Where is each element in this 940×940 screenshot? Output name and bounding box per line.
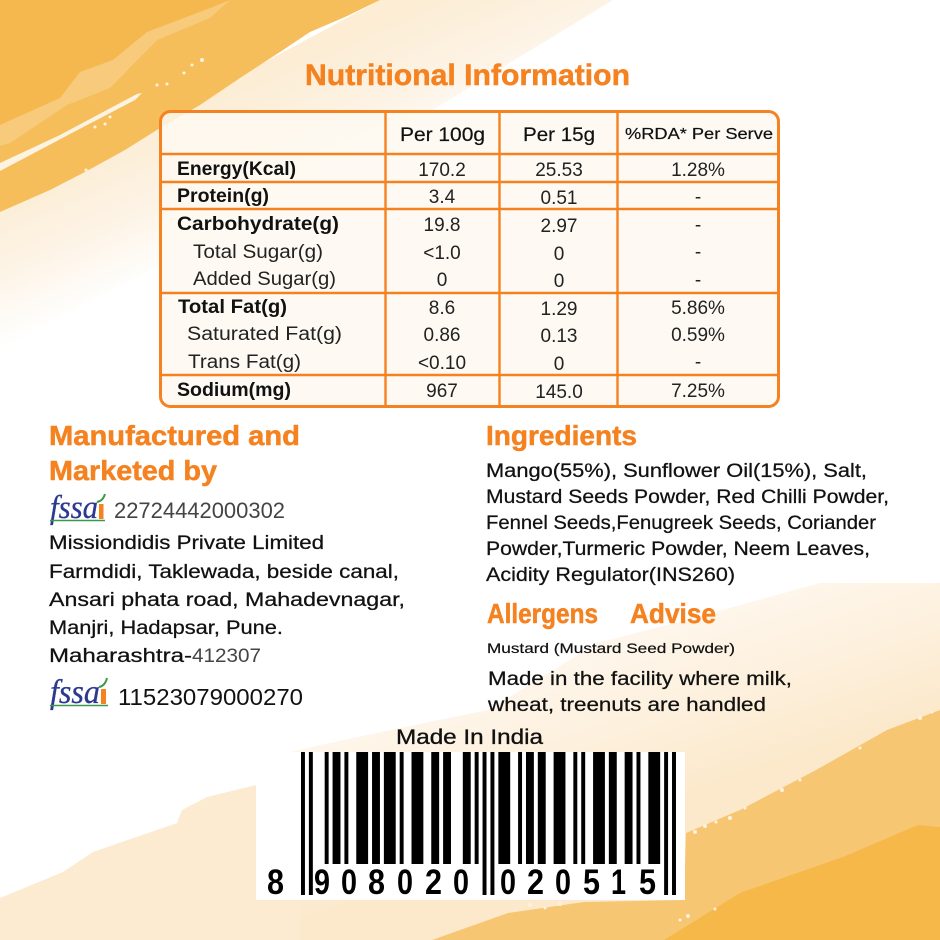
facility note [487, 669, 792, 716]
background: top-left white streak [0, 58, 204, 172]
made in india label: Made In India [396, 726, 543, 749]
barcode digits: 8 [267, 863, 284, 902]
facility note: wheat, treenuts are handled [487, 695, 766, 716]
address text: 412307 [192, 646, 261, 667]
row: carbohydrate: - [695, 215, 701, 236]
panel: nutrition table [160, 112, 778, 406]
row: total fat [178, 297, 725, 320]
row: sodium: 967 [426, 381, 458, 402]
address text: Ansari phata road, Mahadevnagar, [49, 590, 405, 611]
barcode digits: 0 [397, 863, 413, 902]
row: added sugar: 0 [437, 270, 447, 291]
ingredients list: Powder,Turmeric Powder, Neem Leaves, [486, 539, 870, 560]
row: protein [177, 186, 701, 209]
barcode digits: 0 [500, 863, 516, 902]
heading: manufactured and marketed by: Marketed by [49, 455, 217, 486]
row: total sugar: Total Sugar(g) [193, 242, 323, 263]
icon: fssai logo 2: fssa [50, 674, 100, 711]
licence number 2: 11523079000270 [118, 684, 303, 710]
table frame [160, 112, 778, 406]
row: trans fat: Trans Fat(g) [188, 352, 301, 373]
ingredients list: Mango(55%), Sunflower Oil(15%), Salt, [486, 461, 867, 482]
heading: allergens advise [487, 598, 716, 629]
row: total sugar: - [695, 242, 701, 263]
row: trans fat [188, 352, 701, 375]
background: bottom cream wash [256, 583, 940, 940]
facility note: Made in the facility where milk, [488, 669, 792, 690]
row: saturated fat: 0.86 [424, 325, 460, 346]
row: carbohydrate: 19.8 [424, 215, 460, 236]
row: sodium: Sodium(mg) [177, 380, 291, 401]
barcode digits: 5 [583, 863, 600, 902]
ingredients list: Acidity Regulator(INS260) [486, 565, 735, 586]
row: saturated fat: 0.59% [671, 325, 725, 346]
row: saturated fat [187, 324, 725, 347]
heading: manufactured and marketed by: Manufactured and [49, 420, 300, 451]
barcode digits: 2 [527, 863, 544, 902]
row: sodium [177, 380, 725, 403]
barcode digits: 5 [639, 863, 656, 902]
background: top-left dark brush area [0, 0, 230, 125]
heading: ingredients: Ingredients [486, 420, 637, 451]
address text: Missiondidis Private Limited [49, 533, 324, 554]
address text: Manjri, Hadapsar, Pune. [49, 618, 283, 639]
row: carbohydrate [177, 214, 701, 237]
barcode [256, 752, 685, 902]
background: top-left lighter brush streak [0, 0, 230, 146]
barcode digits: 9 [314, 863, 330, 902]
row: total fat: 8.6 [429, 298, 455, 319]
row: saturated fat: 0.13 [541, 326, 577, 347]
background: top-left cream wash [0, 0, 613, 350]
ingredients list: Mustard Seeds Powder, Red Chilli Powder, [486, 487, 889, 508]
row: total fat: 5.86% [671, 298, 725, 319]
row: total sugar: <1.0 [423, 243, 461, 264]
barcode background [256, 752, 685, 900]
icon: fssai logo: fssa [50, 490, 98, 526]
barcode digits: 0 [555, 863, 571, 902]
row: added sugar: Added Sugar(g) [193, 269, 336, 290]
row: energy [177, 159, 725, 181]
row: carbohydrate: 2.97 [541, 216, 577, 237]
background: bottom-left cream wash [0, 785, 300, 940]
row: trans fat: <0.10 [418, 353, 466, 374]
row: total sugar: 0 [554, 244, 564, 265]
row: energy: 25.53 [535, 160, 583, 181]
ingredients list [486, 461, 889, 586]
row: added sugar: - [695, 270, 701, 291]
heading: allergens advise: Advise [630, 598, 716, 629]
allergen text: Mustard (Mustard Seed Powder) [487, 640, 735, 656]
address text [49, 533, 405, 667]
panel: allergens [487, 598, 792, 716]
barcode digits: 8 [368, 863, 385, 902]
row: added sugar [193, 269, 701, 292]
row: total fat: Total Fat(g) [178, 297, 287, 318]
address text: Farmdidi, Taklewada, beside canal, [49, 562, 399, 583]
row: saturated fat: Saturated Fat(g) [187, 324, 342, 345]
barcode digits: 0 [341, 863, 357, 902]
row: energy: 1.28% [671, 160, 725, 181]
background: top-left orange brush stroke [0, 0, 380, 212]
table header row: Per 100g [400, 125, 485, 146]
row: energy: Energy(Kcal) [177, 159, 296, 180]
background: bottom medium orange brush stroke [432, 710, 940, 940]
row: carbohydrate: Carbohydrate(g) [177, 214, 339, 235]
background: bottom dark orange brush stroke [664, 825, 940, 940]
row: sodium: 145.0 [535, 382, 583, 403]
table header row [400, 125, 773, 146]
row: total sugar [193, 242, 701, 265]
row: sodium: 7.25% [671, 381, 725, 402]
row: protein: 0.51 [541, 188, 577, 209]
row: protein: Protein(g) [177, 186, 269, 207]
title: Nutritional Information [305, 59, 630, 92]
table grid [161, 112, 778, 406]
barcode digits: 1 [611, 863, 626, 902]
panel: manufacturer [49, 420, 405, 711]
row: protein: 3.4 [429, 187, 456, 208]
address text: Maharashtra- [49, 646, 192, 667]
table header row: %RDA* Per Serve [625, 126, 773, 143]
row: trans fat: 0 [554, 354, 564, 375]
row: protein: - [695, 187, 701, 208]
row: added sugar: 0 [554, 271, 564, 292]
row: energy: 170.2 [418, 160, 466, 181]
row: total fat: 1.29 [541, 299, 577, 320]
table header row: Per 15g [523, 125, 595, 146]
barcode digits: 2 [425, 863, 442, 902]
heading: manufactured and marketed by [49, 420, 300, 486]
barcode bars [301, 752, 676, 895]
row: trans fat: - [695, 352, 701, 373]
background: speckles on brush edge [528, 710, 934, 922]
licence number: 22724442000302 [114, 498, 285, 523]
barcode digits [267, 863, 656, 902]
barcode digits: 0 [453, 863, 469, 902]
panel: ingredients [486, 420, 889, 586]
heading: allergens advise: Allergens [487, 598, 598, 629]
ingredients list: Fennel Seeds,Fenugreek Seeds, Coriander [486, 513, 877, 534]
